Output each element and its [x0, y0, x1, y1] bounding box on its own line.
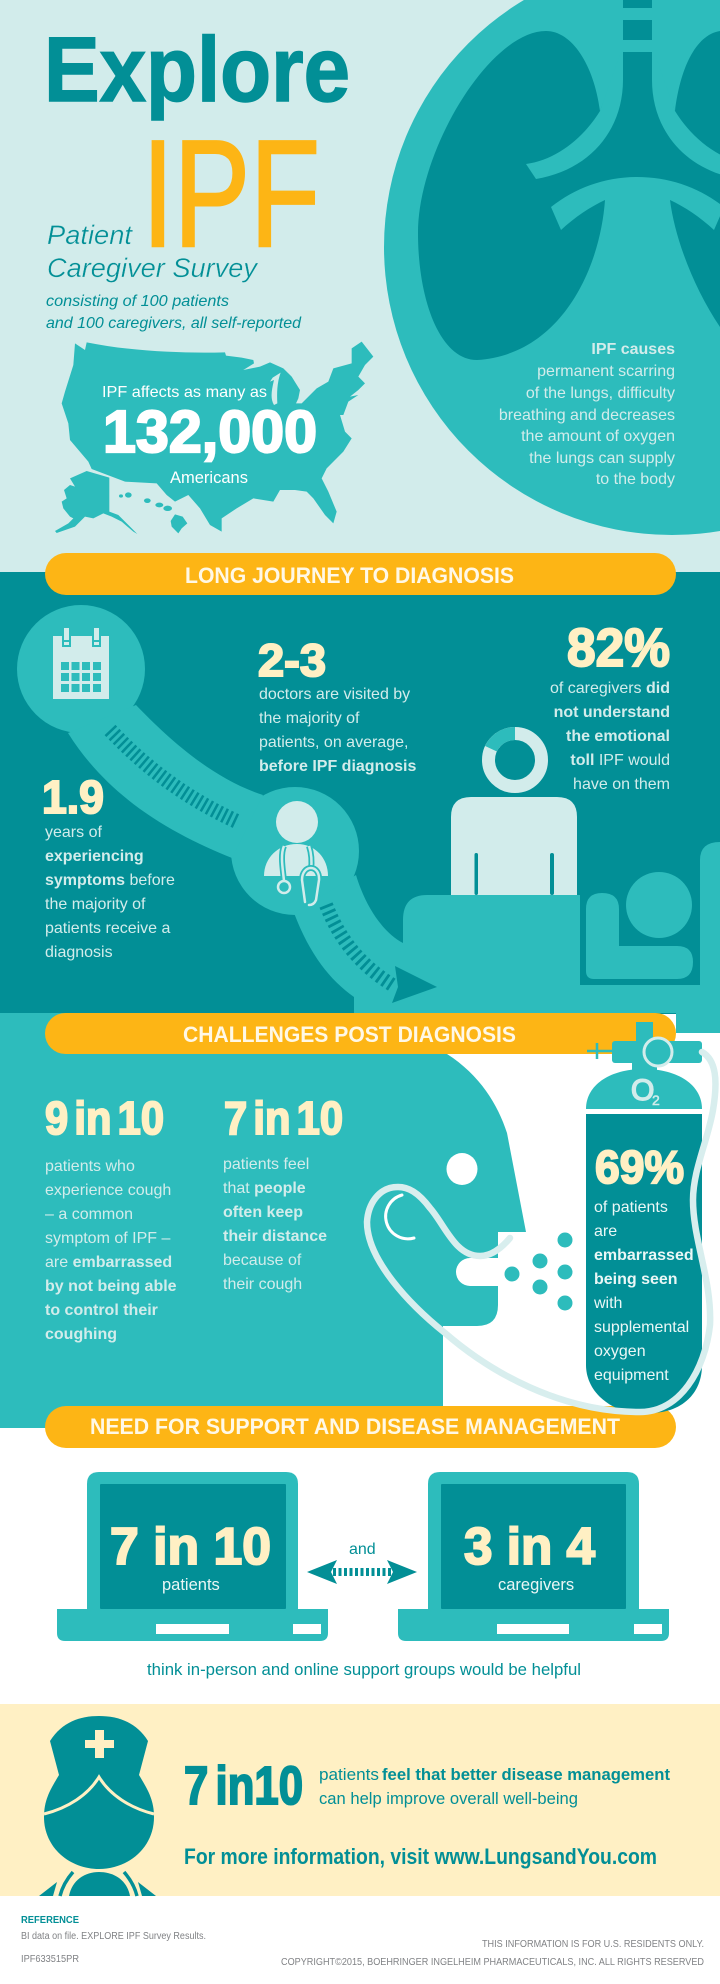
survey description — [46, 293, 302, 332]
title: Explore: Explore — [44, 19, 350, 121]
panel: long journey to diagnosis — [0, 572, 720, 1033]
stat: 1.9 years: diagnosis — [45, 944, 113, 961]
text: IPF causes: the amount of oxygen — [521, 428, 675, 445]
icon: double arrow — [307, 1560, 417, 1584]
oxygen tube — [367, 1052, 715, 1412]
icon: oxygen tank: 2 — [652, 1092, 660, 1108]
text: IPF causes: the lungs can supply — [529, 450, 675, 467]
stat: 82% caregivers: the emotional — [566, 728, 670, 745]
footer — [21, 1914, 704, 1968]
stat: 9 in 10: are embarrassed — [45, 1254, 172, 1271]
panel: support groups — [57, 1472, 669, 1679]
footer: IPF633515PR — [21, 1954, 79, 1965]
stat: 132,000 Americans: 132,000 — [103, 399, 317, 465]
survey description: and 100 caregivers, all self-reported — [46, 315, 302, 332]
text: better disease management: can help improve overall well-being — [319, 1789, 578, 1808]
stat: 7 in 10 distance — [223, 1092, 343, 1293]
stat: 69%: 69% — [595, 1141, 684, 1193]
stat: 9 in 10: – a common — [45, 1206, 133, 1223]
subtitle: Caregiver Survey: Caregiver Survey — [47, 253, 259, 283]
panel: challenges post diagnosis — [0, 1013, 572, 1428]
survey description: consisting of 100 patients — [46, 293, 229, 310]
stat: 69%: equipment — [594, 1367, 669, 1384]
stat: 7 in 10 distance: because of — [223, 1252, 302, 1269]
icon: laptop patients: patients — [162, 1576, 220, 1594]
stat: 82% caregivers: of caregivers did — [550, 680, 670, 697]
stat: 9 in 10: coughing — [45, 1326, 117, 1343]
stat: 9 in 10 — [45, 1092, 177, 1343]
icon: oxygen tank: O — [631, 1074, 654, 1107]
footer: REFERENCE — [21, 1914, 79, 1926]
icon: lungs in circle — [384, 0, 720, 535]
title: IPF: IPF — [142, 109, 320, 279]
stat: 2-3 doctors: the majority of — [259, 710, 360, 727]
stat: 69%: supplemental — [594, 1319, 689, 1336]
stat: 82% caregivers: have on them — [573, 776, 670, 793]
stat: 1.9 years: the majority of — [45, 896, 146, 913]
icon: laptop caregivers: 3 in 4 — [464, 1518, 595, 1576]
text: IPF causes: IPF causes — [591, 341, 675, 358]
stat: 2-3 doctors: doctors are visited by — [259, 686, 410, 703]
stat: 1.9 years: symptoms before — [45, 872, 175, 889]
stat: 69%: are — [594, 1223, 617, 1240]
stat: 69% — [593, 1141, 694, 1384]
icon: oxygen tank — [586, 1022, 702, 1413]
caption: support groups: think in-person and online support groups would be helpful — [147, 1661, 581, 1679]
stat: 7 in 10 distance: their cough — [223, 1276, 302, 1293]
panel: disease management — [0, 1704, 720, 1896]
section bar: support: NEED FOR SUPPORT AND DISEASE MANAGEMENT — [90, 1414, 621, 1439]
text: IPF causes: to the body — [596, 471, 675, 488]
stat: 69%: of patients — [594, 1199, 668, 1216]
text: better disease management: patients — [319, 1765, 379, 1784]
section bar: long journey: LONG JOURNEY TO DIAGNOSIS — [185, 563, 514, 588]
stat: 2-3 doctors: before IPF diagnosis — [259, 758, 416, 775]
stat: 7 in 10 distance: patients feel — [223, 1156, 309, 1173]
text: IPF causes: of the lungs, difficulty — [526, 385, 675, 402]
stat: 69%: embarrassed — [594, 1247, 694, 1264]
call to action: For more information, visit www.LungsandYou.com — [184, 1844, 657, 1869]
journey path — [17, 605, 720, 1033]
section bar: support — [45, 1406, 676, 1448]
stat: 69%: with — [593, 1295, 622, 1312]
section bar: challenges: CHALLENGES POST DIAGNOSIS — [183, 1022, 516, 1047]
stat: 1.9 years: experiencing — [45, 848, 144, 865]
stat: 9 in 10: experience cough — [45, 1182, 171, 1199]
icon: calendar — [53, 628, 109, 699]
stat: 9 in 10: to control their — [45, 1302, 158, 1319]
stat: 9 in 10: patients who — [45, 1158, 135, 1175]
stat: 132,000 Americans — [102, 384, 317, 487]
section bar: challenges — [45, 1013, 676, 1054]
stat: 7 in 10 distance: that people — [223, 1180, 306, 1197]
map: United States — [55, 342, 373, 534]
text: IPF causes: breathing and decreases — [499, 407, 675, 424]
stat: 7 in 10 management: 7 in10 — [184, 1757, 303, 1816]
stat: 2-3 doctors: patients, on average, — [259, 734, 408, 751]
cough droplets — [504, 1232, 572, 1310]
icon: laptop patients: 7 in 10 — [110, 1518, 271, 1576]
text: better disease management: feel that better disease management — [382, 1765, 670, 1784]
stat: 2-3 doctors — [258, 635, 416, 775]
illustration: head profile — [0, 1013, 526, 1428]
icon: patient in bed — [586, 872, 693, 979]
panel: intro header — [0, 0, 720, 572]
stat: 9 in 10: by not being able — [45, 1278, 177, 1295]
text: IPF causes: permanent scarring — [537, 363, 675, 380]
stat: 82% caregivers: toll IPF would — [570, 752, 670, 769]
stat: 132,000 Americans: Americans — [170, 469, 248, 487]
subtitle: Patient: Patient — [47, 220, 134, 250]
stat: 7 in 10 distance: 7 in 10 — [224, 1092, 343, 1144]
icon: caregiver figure with donut head — [451, 734, 577, 895]
icon: laptop patients — [57, 1472, 328, 1641]
stat: 1.9 years: years of — [45, 824, 102, 841]
icon: nurse — [39, 1716, 156, 1896]
stat: 82% caregivers — [550, 619, 670, 793]
stat: 9 in 10: 9 in 10 — [45, 1092, 164, 1144]
icon: doctor — [264, 801, 328, 905]
stat: 1.9 years: patients receive a — [45, 920, 171, 937]
section bar: long journey — [45, 553, 676, 595]
text: better disease management — [319, 1765, 670, 1808]
icon: laptop caregivers: caregivers — [498, 1576, 574, 1594]
stat: 2-3 doctors: 2-3 — [258, 635, 326, 686]
icon: eye — [446, 1153, 478, 1185]
label: and: and — [349, 1541, 376, 1558]
footer: THIS INFORMATION IS FOR U.S. RESIDENTS ONLY. — [482, 1939, 704, 1950]
icon: laptop caregivers — [398, 1472, 669, 1641]
stat: 132,000 Americans: IPF affects as many as — [102, 384, 267, 401]
stat: 7 in 10 distance: their distance — [223, 1228, 327, 1245]
stat: 9 in 10: symptom of IPF – — [45, 1230, 170, 1247]
stat: 82% caregivers: 82% — [567, 619, 670, 678]
stat: 82% caregivers: not understand — [554, 704, 670, 721]
stat: 1.9 years — [42, 771, 175, 961]
text: IPF causes — [499, 341, 675, 488]
stat: 1.9 years: 1.9 — [42, 771, 104, 823]
stat: 7 in 10 distance: often keep — [223, 1204, 303, 1221]
stat: 69%: oxygen — [594, 1343, 646, 1360]
stat: 69%: being seen — [594, 1271, 678, 1288]
icon: ear — [386, 1195, 414, 1239]
footer: BI data on file. EXPLORE IPF Survey Results. — [21, 1931, 206, 1942]
